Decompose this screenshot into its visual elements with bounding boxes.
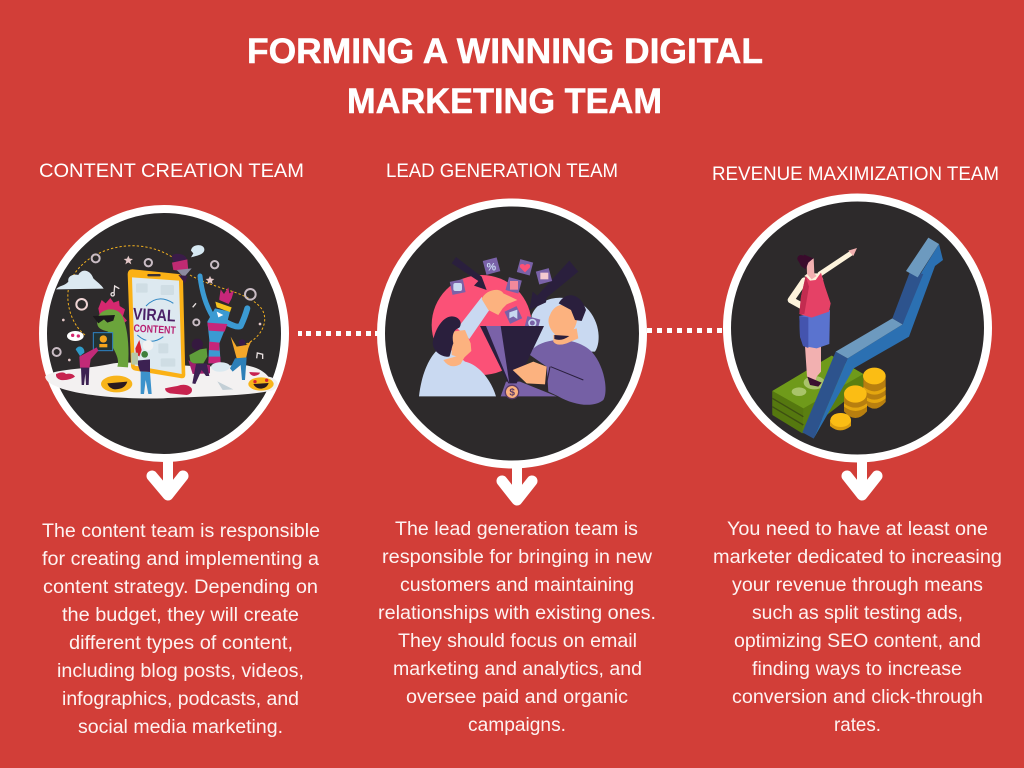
text block: content team: including blog posts, videos, (57, 661, 304, 682)
text block: revenue team (713, 519, 1002, 736)
text block: lead generation team: campaigns. (468, 715, 566, 736)
floating icon tiles: % (487, 261, 497, 273)
text block: revenue team: rates. (834, 715, 881, 736)
pink circle (432, 275, 532, 375)
text block: content team: infographics, podcasts, and (62, 689, 299, 710)
money stack (772, 356, 863, 433)
heading: content creation team: CONTENT CREATION TEAM (39, 161, 304, 182)
cloud (56, 271, 104, 289)
person on phone (172, 245, 204, 283)
text block: content team: The content team is responsible (42, 521, 320, 542)
platform (45, 363, 278, 399)
arrow: down from lead panel (502, 466, 532, 500)
phone: VIRAL (132, 304, 176, 326)
paper plane (217, 381, 233, 390)
dotted connector: middle to right (647, 328, 722, 333)
panel: lead generation illustration (381, 202, 643, 464)
panel: content creation illustration (43, 209, 285, 458)
text block: revenue team: such as split testing ads, (752, 603, 963, 624)
dashed orbit (68, 246, 265, 345)
afro person (188, 339, 210, 384)
text block: lead generation team: customers and maintaining (400, 575, 634, 596)
text block: lead generation team (378, 519, 656, 736)
panel: revenue maximization illustration (727, 198, 988, 458)
dotted connector: left to middle (298, 331, 379, 336)
speech bubble (67, 331, 84, 341)
coin stacks (830, 368, 886, 430)
text block: revenue team: your revenue through means (732, 575, 983, 596)
text block: revenue team: You need to have at least one (727, 519, 988, 540)
text block: lead generation team: The lead generation team is (395, 519, 638, 540)
text block: lead generation team: They should focus on email (398, 631, 637, 652)
floating icon tiles (450, 257, 552, 331)
platform hearts (56, 372, 260, 395)
emoji faces (101, 376, 274, 392)
text block: revenue team: optimizing SEO content, and (734, 631, 981, 652)
heading: revenue maximization team: REVENUE MAXIMIZATION TEAM (712, 164, 999, 185)
text block: revenue team: marketer dedicated to increasing (713, 547, 1002, 568)
phone: CONTENT (133, 323, 176, 337)
text block: content team: for creating and implementing a (42, 549, 319, 570)
text block: content team: social media marketing. (78, 717, 283, 738)
person with foam finger (131, 340, 153, 394)
music notes (111, 286, 263, 359)
woman with tablet (76, 346, 98, 385)
shattered glass (211, 362, 230, 372)
title: FORMING A WINNING DIGITAL (247, 32, 763, 71)
heading: lead generation team: LEAD GENERATION TEAM (386, 161, 618, 182)
text block: lead generation team: marketing and analytics, and (393, 659, 642, 680)
right person (513, 295, 606, 405)
phone (128, 269, 185, 378)
text block: revenue team: conversion and click-through (732, 687, 983, 708)
dinosaur (93, 298, 129, 367)
funnel: $ (509, 388, 515, 399)
dark arrows (452, 257, 578, 310)
text block: lead generation team: relationships with existing ones. (378, 603, 656, 624)
text block: lead generation team: responsible for bringing in new (382, 547, 652, 568)
text block: revenue team: finding ways to increase (752, 659, 962, 680)
left person (419, 290, 517, 396)
inflatable tube man (200, 276, 247, 363)
orbit icons (53, 254, 256, 356)
dancing person (230, 337, 252, 380)
tablet (93, 333, 113, 351)
arrow: down from content panel (152, 460, 183, 495)
text block: content team: content strategy. Depending on (43, 577, 318, 598)
text block: content team (42, 521, 320, 738)
funnel (480, 326, 557, 399)
blue semicircle right (530, 298, 599, 352)
woman (791, 248, 857, 387)
title (247, 32, 763, 121)
text block: content team: the budget, they will create (62, 605, 299, 626)
arrow: down from revenue panel (847, 461, 877, 495)
title: MARKETING TEAM (347, 82, 662, 121)
growth arrow (802, 238, 943, 439)
text block: content team: different types of content, (69, 633, 293, 654)
text block: lead generation team: oversee paid and organic (406, 687, 628, 708)
